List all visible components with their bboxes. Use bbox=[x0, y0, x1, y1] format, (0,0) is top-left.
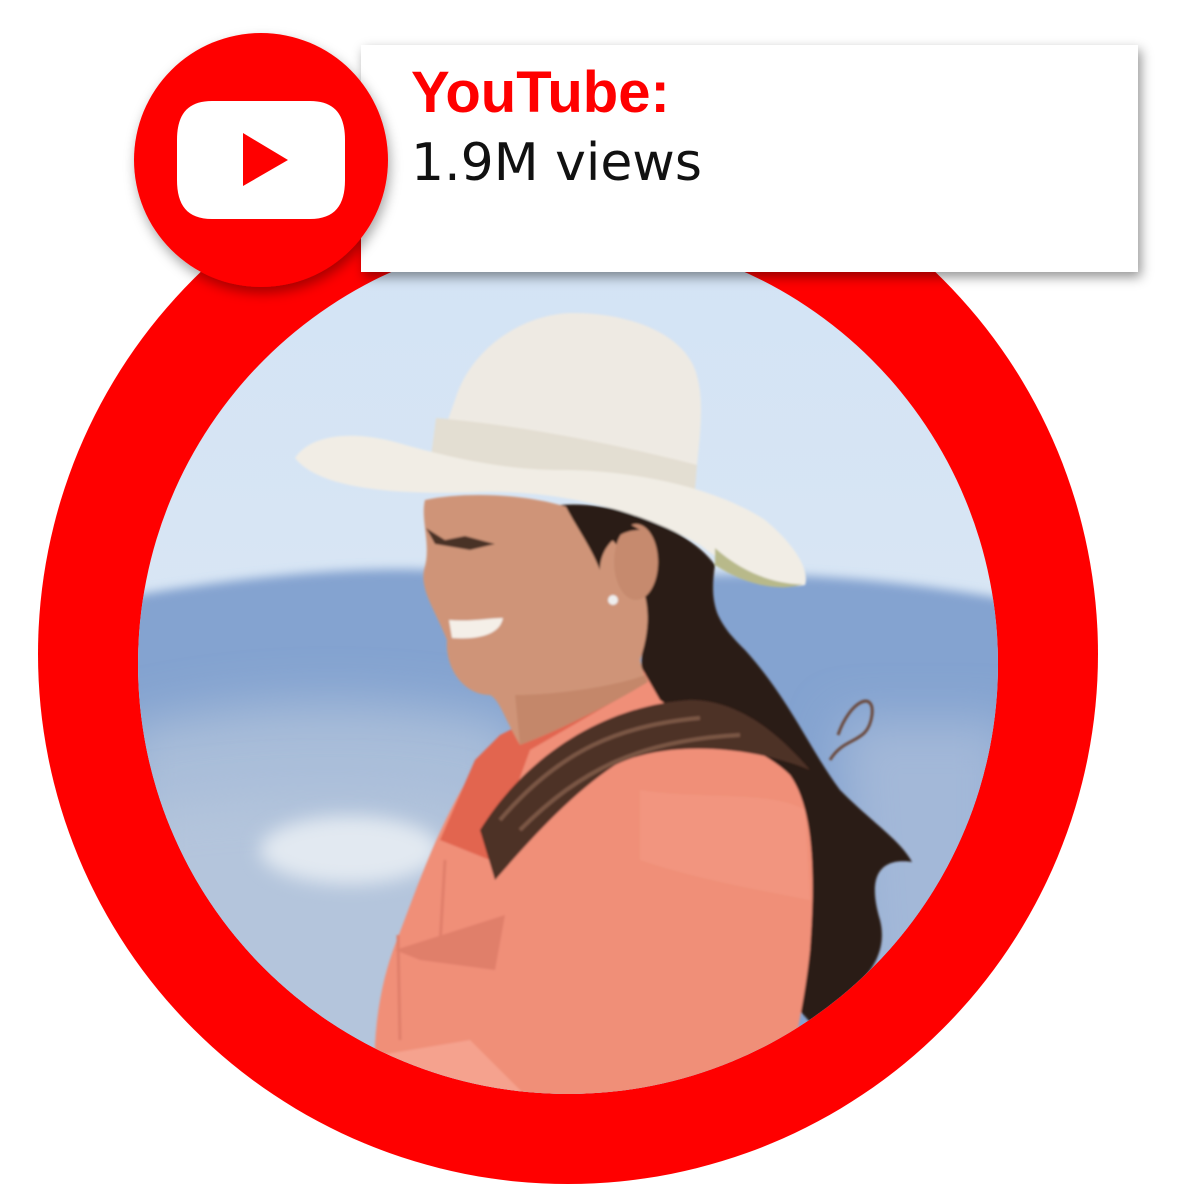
face and neck bbox=[423, 495, 648, 745]
platform name: YouTube: bbox=[411, 60, 670, 125]
portrait ring with photo bbox=[38, 238, 1098, 1184]
stat card bbox=[361, 45, 1138, 272]
shirt bbox=[374, 665, 813, 1100]
hair bbox=[560, 502, 913, 1021]
view count: 1.9M views bbox=[411, 133, 702, 193]
windblown hair strands bbox=[480, 700, 810, 880]
hat bbox=[430, 313, 701, 485]
red outer ring bbox=[38, 124, 1098, 1184]
photo: woman in white hat against blue mountains bbox=[120, 230, 1010, 1110]
